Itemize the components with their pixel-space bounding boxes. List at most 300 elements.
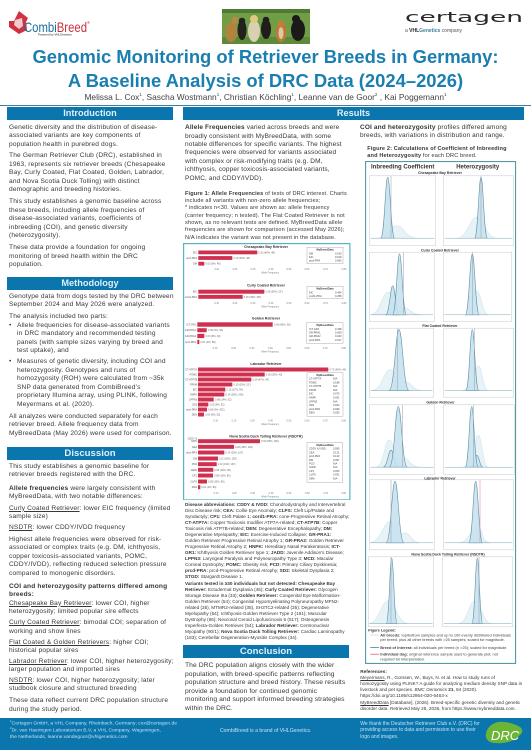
- text: highest allele frequencies: associated or complex traits (e.g. DM, ichthyosis,: [9, 544, 160, 551]
- chart: Nova Scotia Duck Tolling Retriever: 0.70: [323, 491, 329, 494]
- text: disease abbreviations: [185, 502, 349, 579]
- chart: Nova Scotia Duck Tolling Retriever: Nova Scotia Duck Tolling Retriever (NSDTR): [229, 434, 303, 438]
- text: COI and heterozygosity results: COI and heterozygosity profiles differed among: [360, 124, 507, 130]
- text: flat coated and golden COI: Flat Coated & Golden Retrievers: higher COI;: [9, 638, 149, 646]
- heading: Introduction: [7, 107, 173, 120]
- chart: Labrador Retriever: 0.035: [333, 410, 340, 414]
- chart: Nova Scotia Duck Tolling Retriever: SMA: [309, 476, 315, 480]
- text: discussion closing: during the study period.: [9, 706, 82, 712]
- footer: acknowledgement: [360, 721, 480, 740]
- chart: Labrador Retriever: 0.29 (47%; 44): [252, 378, 269, 381]
- chart: Chesapeake Bay Retriever: 0.019: [335, 254, 342, 258]
- text: introduction paragraph 2: Bay, Curly Coated, Flat Coated, Golden, Labrador,: [9, 169, 164, 176]
- chart: Curly Coated Retriever: 0.36 (50%; 22*): [266, 290, 283, 293]
- chart: Nova Scotia Duck Tolling Retriever: 0.14 (25%; 167): [225, 451, 243, 454]
- chart: Nova Scotia Duck Tolling Retriever: CDDY &: [188, 437, 197, 440]
- chart: Labrador Retriever: 0.03 (6%; 52): [205, 413, 220, 416]
- text: flat coated and golden COI: historical popular sires: [9, 647, 78, 654]
- chart: Curly Coated Retriever: 0.25 (39%; 28*): [244, 295, 261, 298]
- text: introduction paragraph 2: demographic and breeding histories.: [9, 186, 121, 193]
- chart: Labrador Retriever: 0.05 (9%; 402): [208, 408, 225, 411]
- chart: Nova Scotia Duck Tolling Retriever: N/A: [333, 461, 338, 465]
- bullet 1: [9, 322, 170, 354]
- text: introduction paragraph 3: [9, 198, 162, 239]
- logo: certagen: [405, 10, 523, 34]
- text: discussion closing: [9, 697, 168, 712]
- text: figure 1 caption: (carrier frequency; n tested). The Flat Coated Retriever is not: [185, 213, 345, 219]
- column heading: Heterozygosity: Heterozygosity: [456, 164, 500, 170]
- text: curly coated difference: Curly Coated Retriever: lower EIC frequency (limited: [9, 504, 171, 512]
- chart: Nova Scotia Duck Tolling Retriever: 0.11 (20%; 150): [219, 457, 237, 460]
- chart: Golden Retriever: 0.50: [286, 346, 292, 350]
- chart: Curly Coated Retriever: 0.70: [323, 302, 328, 304]
- text: disease abbreviations: Progressive Retinal Atrophy 2; HNPK: Hereditary Nasal Parakeratosis; ICT-: [185, 544, 340, 549]
- text: variants tested but not detected: Imperfecta-Golden Retriever (54); Labrador Retriever: Centronuclear: [185, 623, 329, 628]
- text: discussion intro: This study establishes a genomic baseline for: [9, 463, 149, 470]
- chart: Nova Scotia Duck Tolling Retriever: 0.20 (36%; 182): [235, 445, 253, 448]
- text: allele frequencies results: POMC, and CDDY/IVDD).: [185, 175, 263, 182]
- bullet 1: test uptake), and: [17, 347, 69, 354]
- chart: Labrador Retriever: SD2: [192, 403, 198, 406]
- chart: Labrador Retriever: 0.044: [333, 403, 340, 407]
- text: disease abbreviations: Golden Retriever Progressive Retinal Atrophy 1; GR-PRA2: Golden Retriever: [185, 538, 344, 543]
- text: curly coated COI: Curly Coated Retriever: bimodal COI; separation of: [9, 619, 166, 626]
- chart: Labrador Retriever: N/A: [333, 387, 338, 391]
- heading: Methodology: Methodology: [61, 278, 119, 288]
- footer: affiliations: 2 Dr. van Haeringen Laboratorium B.V, a VHL Company, Wageningen,: [10, 726, 161, 734]
- text: conclusion: [185, 662, 345, 712]
- text: allele frequencies results: notable differences for specific variants. The highest: [185, 141, 342, 148]
- chart: Curly Coated Retriever: 0.20: [233, 302, 238, 304]
- text: disease abbreviations: Disc Disease risk; CEA: Collie Eye Anomaly; CLPS: Cleft Lip/Palate and: [185, 508, 334, 513]
- text: NSDTR COI: [9, 677, 155, 692]
- text: NSDTR COI: NSDTR: lower COI, higher heterozygosity; later: [9, 677, 155, 684]
- title: [32, 46, 498, 91]
- text: allele frequencies discussion: MyBreedData, with two notable differences:: [9, 493, 143, 500]
- chart: Golden Retriever: 0.059: [335, 330, 342, 334]
- text: curly coated COI: [9, 619, 166, 634]
- bullet 2: SNP data generated from CombiBreed’s: [17, 384, 141, 391]
- text: highest allele frequencies: compared to monogenic disorders.: [9, 570, 116, 576]
- heading: Methodology: [7, 277, 173, 290]
- text: figure 1 caption: N/A indicates the variant was not present in the database.: [185, 235, 336, 241]
- text: disease abbreviations: Syndactyly; CP1: Cleft Palate 1; cord1-PRA: cone-Progressive Retinal Atrophy;: [185, 514, 349, 519]
- chart: Curly Coated Retriever: Allele Frequency: [261, 305, 280, 308]
- text: methodology closing: MyBreedData (May 2026) were used for comparison.: [9, 430, 172, 436]
- chart: Golden Retriever: 0.01 (2%; 88): [200, 340, 216, 343]
- chart: Curly Coated Retriever: 0.10: [214, 302, 220, 304]
- figure legend: Individual dog: original reference sample used to generate plot; not: [380, 651, 499, 656]
- plot group: Golden Retriever: Golden Retriever: [426, 400, 455, 404]
- column heading: Inbreeding Coefficient: Inbreeding Coefficient: [371, 164, 434, 170]
- bullet list: analysis parts: •: [9, 322, 11, 328]
- chart: Golden Retriever: 0.80: [341, 346, 347, 350]
- chart: Chesapeake Bay Retriever: 0.60: [305, 268, 310, 270]
- chart: Curly Coated Retriever: 0.30: [251, 302, 256, 304]
- text: allele frequencies results: broadly consistent with MyBreedData, with some: [185, 132, 331, 140]
- text: conclusion: The DRC population aligns closely with the wider: [185, 662, 334, 669]
- chart: Nova Scotia Duck Tolling Retriever: CEA: [309, 450, 315, 454]
- text: highest allele frequencies: [9, 536, 167, 576]
- chart: Chesapeake Bay Retriever: 0.33 (46%; 48): [258, 251, 275, 254]
- text: references: homozygosity using PLINK? A guide for analyzing medium density SNP data in: [360, 681, 522, 686]
- chart: Golden Retriever: [185, 316, 347, 353]
- text: figure 1 caption: * indicates n<30. Values are shown as: allele frequency: [185, 205, 330, 211]
- chart: Nova Scotia Duck Tolling Retriever: 0.08 (16%; 96): [214, 468, 231, 471]
- chart: Nova Scotia Duck Tolling Retriever: DM: [193, 457, 197, 460]
- figure legend: Figure Legend:: [368, 628, 396, 632]
- chart: Nova Scotia Duck Tolling Retriever: 0.60: [305, 491, 310, 494]
- chart: Nova Scotia Duck Tolling Retriever: 0.34 (56%; 180): [261, 440, 279, 443]
- chart: Golden Retriever: 0.70: [323, 346, 328, 350]
- text: figure 1 caption: shown, as no relevant tests are defined. MyBreedData allele: [185, 220, 343, 226]
- text: curly coated difference: [9, 504, 171, 520]
- plot group: Nova Scotia Duck Tolling Retriever: [368, 552, 513, 626]
- chart: Golden Retriever: 0.05 (9%; 92): [208, 329, 223, 332]
- figure 2: COI and heterozygosity density plots: [365, 161, 516, 664]
- chart: Chesapeake Bay Retriever: [186, 244, 347, 274]
- text: methodology intro: September 2024 and May 2026 were analyzed.: [9, 301, 154, 308]
- chart: Golden Retriever: Golden Retriever: [252, 316, 281, 320]
- chart: Chesapeake Bay Retriever: EIC: [193, 251, 197, 254]
- chart: Curly Coated Retriever: 0.50: [287, 302, 292, 304]
- bullet 2: [9, 358, 167, 408]
- chart: Nova Scotia Duck Tolling Retriever: 0.08 (15%; 96): [214, 474, 231, 477]
- chart: Chesapeake Bay Retriever: 0.70: [323, 268, 328, 270]
- chart: Golden Retriever: GR-PRA1: [309, 330, 321, 334]
- chart: Labrador Retriever: 0.070: [333, 391, 340, 395]
- text: variants tested but not detected: Retriever: Ectodermal Dysplasia (45); Curly Coated Retriever: Glycogen: [185, 587, 338, 592]
- chart: Labrador Retriever: DEN: [192, 413, 197, 416]
- chart: Chesapeake Bay Retriever: EIC: [309, 254, 313, 258]
- chart: Curly Coated Retriever: 0.434: [335, 290, 342, 294]
- text: references: References:: [360, 669, 387, 674]
- chart: Nova Scotia Duck Tolling Retriever: MyBreedData: [316, 443, 334, 447]
- text: disease abbreviations: STGD: Stargardt Disease 1.: [185, 574, 243, 579]
- chart: Golden Retriever: GR-PRA1: [185, 329, 197, 332]
- header rule: [0, 105, 531, 106]
- chart: Labrador Retriever: 0.80: [341, 419, 347, 422]
- chart: Labrador Retriever: N/A: [333, 384, 338, 388]
- chart: Chesapeake Bay Retriever: 0.30: [251, 268, 256, 270]
- text: curly coated COI: working and show lines: [9, 628, 81, 634]
- text: disease abbreviations: GR1: Ichthyosis Golden Retriever type 1; JADD: Juvenile Addison’s Disease;: [185, 550, 344, 555]
- chart: Labrador Retriever: CT-ATP7A: [185, 368, 197, 371]
- DRC wordmark: DRC: [491, 728, 520, 743]
- text: disease abbreviations: LPPN3: Laryngeal Paralysis and Polyneuropathy Type 3; MCD: Macular: [185, 556, 334, 561]
- chart: Chesapeake Bay Retriever: 0.40: [269, 268, 274, 270]
- chart: Nova Scotia Duck Tolling Retriever: IVDD: [191, 440, 197, 443]
- chart: Nova Scotia Duck Tolling Retriever: 0.05 (10%; 96): [208, 480, 225, 483]
- footer: affiliations: the Netherlands, leanne.vandegoor@vhlgenetics.com: [10, 735, 128, 740]
- chart: Nova Scotia Duck Tolling Retriever: prcd-PRA: [309, 454, 321, 458]
- chart: Labrador Retriever: 0.15 (27%; 54): [226, 388, 243, 391]
- text: COI and heterozygosity results: breeds, with variations in distribution and range.: [360, 132, 505, 139]
- text: labrador COI: larger population and imported sires: [9, 666, 120, 673]
- chart: Labrador Retriever: N/A: [333, 399, 338, 403]
- bullet 2: heterozygosity. Genotypes and runs of: [17, 367, 135, 374]
- chart: Golden Retriever: ICT-GR1: [186, 323, 197, 326]
- chart: Chesapeake Bay Retriever: 0.19 (33%; 48): [234, 256, 250, 259]
- chart: Golden Retriever: Allele Frequency: [261, 350, 280, 353]
- text: introduction paragraph 1: Genetic diversity and the distribution of disease-: [9, 124, 157, 131]
- text: variants tested but not detected: Myopathy (90/1); Nova Scotia Duck Tolling Retriever: Cardiac Laminopathy: [185, 629, 345, 634]
- chart: Chesapeake Bay Retriever: 0.056: [335, 258, 342, 262]
- chart: Labrador Retriever: MyBreedData: [316, 373, 334, 377]
- chart: Golden Retriever: 0.40: [268, 346, 273, 350]
- text: introduction paragraph 4: These data provide a foundation for ongoing: [9, 244, 145, 251]
- text: disease abbreviations: CT-ATP7A: Copper Toxicosis modifier ATP7A-related; CT-ATP7B: Copper: [185, 520, 337, 525]
- text: allele frequencies results: [185, 124, 342, 182]
- text: introduction paragraph 1: associated variants are key components of: [9, 132, 141, 139]
- chart: Golden Retriever: 0.60: [305, 346, 310, 350]
- text: curly coated difference: sample size): [9, 513, 48, 520]
- chart: Curly Coated Retriever: cord1-PRA: [185, 295, 197, 298]
- chart: Golden Retriever: MyBreedData: [316, 323, 334, 327]
- chart: Chesapeake Bay Retriever: prcd-PRA: [309, 258, 321, 262]
- chart: Nova Scotia Duck Tolling Retriever: JADD: [190, 468, 197, 471]
- text: conclusion: within the DRC.: [185, 705, 233, 712]
- text: introduction paragraph 2: The German Retriever Club (DRC), established in: [9, 152, 162, 159]
- chart: Nova Scotia Duck Tolling Retriever: 0.10: [214, 491, 219, 494]
- chart: Labrador Retriever: [185, 362, 347, 426]
- title: A Baseline Analysis of DRC Data (2024–2026): [68, 70, 463, 91]
- chart: Labrador Retriever: DEN: [309, 410, 315, 414]
- chart: Labrador Retriever: 0.60: [305, 419, 310, 422]
- certagen wordmark: certagen: [405, 10, 523, 26]
- chart: Labrador Retriever: 0.20: [232, 419, 237, 422]
- text: figure 1 caption: [185, 191, 347, 241]
- footer: affiliations: 1 Certagen GmbH, a VHL Company, Rheinbach, Germany; cox@certagen.de: [10, 719, 177, 727]
- chart: Chesapeake Bay Retriever: Allele Frequency: [261, 271, 280, 274]
- chart: Curly Coated Retriever: cord1-PRA: [309, 294, 322, 298]
- plot group: Flat Coated Retriever: [369, 324, 514, 397]
- chart: Nova Scotia Duck Tolling Retriever: DM: [309, 457, 313, 461]
- chart: Golden Retriever: 0.03 (6%; 92): [206, 334, 221, 338]
- chart: Labrador Retriever: LPPN3: [309, 399, 318, 403]
- heading: Discussion: Discussion: [64, 448, 116, 459]
- plot group: Golden Retriever: [369, 400, 514, 474]
- chart: Nova Scotia Duck Tolling Retriever: PCD: [309, 461, 315, 465]
- chart: Curly Coated Retriever: 0.258: [335, 294, 342, 298]
- chart: Labrador Retriever: Allele Frequency: [261, 422, 280, 426]
- chart: Labrador Retriever: 0.14 (26%; 195): [226, 393, 243, 396]
- text: COI patterns heading: [9, 582, 167, 615]
- chart: Nova Scotia Duck Tolling Retriever: 0.133: [333, 454, 340, 458]
- chart: Labrador Retriever: 0.70: [323, 419, 328, 422]
- chart: Curly Coated Retriever: 0.80: [342, 302, 347, 304]
- chart: Labrador Retriever: LPPN3: [189, 398, 198, 401]
- chart: Labrador Retriever: PFKM: [190, 383, 197, 386]
- bullet 2: homozygosity (ROH) were calculated from ~35k: [17, 375, 164, 382]
- chart: Labrador Retriever: SD2: [309, 403, 315, 407]
- icon: CombiBreed crest: [9, 11, 28, 34]
- figure legend: All breeds: top/bottom samples and up to 100 evenly distributed individuals: [380, 632, 511, 637]
- chart: Chesapeake Bay Retriever: DM: [193, 262, 197, 265]
- certagen tagline: a VHLGenetics company: [405, 28, 462, 34]
- text: figure 2 caption: [367, 146, 507, 159]
- text: methodology intro: [9, 293, 174, 308]
- chart: Labrador Retriever: 0.40: [268, 419, 274, 422]
- chart: Nova Scotia Duck Tolling Retriever: CP1: [192, 474, 198, 477]
- chart: Nova Scotia Duck Tolling Retriever: 0.80: [341, 491, 347, 494]
- text: figure 2 caption: and Heterozygosity for each DRC breed.: [367, 153, 477, 159]
- text: allele frequencies results: with complex or risk-modifying traits (e.g. DM,: [185, 158, 323, 165]
- text: flat coated and golden COI: [9, 638, 149, 654]
- plot group: Flat Coated Retriever: Flat Coated Retriever: [422, 324, 458, 328]
- bullet list: analysis parts: •: [9, 358, 11, 365]
- text: highest allele frequencies: copper toxicosis-associated variants, POMC,: [9, 552, 147, 560]
- heading: Conclusion: [183, 645, 349, 658]
- chart: Nova Scotia Duck Tolling Retriever: 0.10 (19%; 167): [218, 463, 236, 466]
- chart: Labrador Retriever: 0.08 (14%; 52): [215, 398, 232, 401]
- text: introduction paragraph 1: population health in purebred dogs.: [9, 141, 118, 148]
- chart: Chesapeake Bay Retriever: MyBreedData: [316, 247, 334, 251]
- chart: Curly Coated Retriever: EIC: [193, 290, 197, 293]
- text: methodology closing: All analyzes were conducted separately for each: [9, 412, 158, 420]
- text: allele frequencies results: ichthyosis, copper toxicosis-associated variants,: [185, 166, 330, 173]
- chart: Nova Scotia Duck Tolling Retriever: 0.031: [333, 472, 340, 476]
- footer: acknowledgement: We thank the Deutscher Retriever Club e.V. (DRC) for: [360, 721, 480, 727]
- plot group: Labrador Retriever: [369, 476, 514, 549]
- chart: Labrador Retriever: HNPK: [309, 395, 316, 399]
- chart: Labrador Retriever: 0.50: [287, 419, 292, 422]
- footer: acknowledgement: logo and images.: [360, 734, 398, 740]
- text: disease abbreviations: prcd-PRA: prcd-Progressive Retinal Atrophy; SD2: Skeletal Dysplasia 2;: [185, 568, 335, 573]
- text: figure 1 caption: include all variants with non-zero allele frequencies;: [185, 198, 320, 204]
- text: COI patterns heading: heterozygosity; limited popular sire effects: [9, 608, 139, 615]
- text: labrador COI: Labrador Retriever: lower COI, higher heterozygosity;: [9, 658, 174, 664]
- logo: CombiBreed: [9, 11, 90, 36]
- text: discussion intro: [9, 463, 149, 478]
- text: introduction paragraph 3: This study establishes a genomic baseline across: [9, 198, 161, 205]
- text: disease abbreviations: Toxicosis risk ATP7B-related; DEN: Degenerative Encephalopathy; DM:: [185, 526, 332, 531]
- text: allele frequencies results: frequencies were observed for variants associated: [185, 149, 336, 156]
- text: introduction paragraph 4: population.: [9, 261, 43, 268]
- chart: Labrador Retriever: HNPK: [190, 393, 197, 396]
- text: variants tested but not detected: Dystrophy (66); Neuronal Ceroid Lipofuscinosis 5 (517); Osteogenesis: [185, 617, 329, 622]
- heading: Introduction: Introduction: [63, 108, 117, 118]
- text: methodology intro: Genotype data from dogs tested by the DRC between: [9, 293, 174, 300]
- footer: acknowledgement: providing access to data and permission to use their: [360, 727, 476, 733]
- chart: Labrador Retriever: 0.72 (90%; 44): [330, 368, 346, 371]
- chart: Chesapeake Bay Retriever: 0.20: [233, 268, 238, 270]
- chart: Labrador Retriever: Labrador Retriever: [250, 362, 282, 366]
- chart: Labrador Retriever: POMC: [190, 373, 197, 376]
- text: introduction paragraph 3: inbreeding (COI), and genetic diversity: [9, 224, 128, 231]
- heading: Conclusion: Conclusion: [240, 646, 292, 657]
- chart: Nova Scotia Duck Tolling Retriever: 0.20: [232, 491, 237, 494]
- chart: Labrador Retriever: 0.05 (9%; 52): [210, 403, 225, 406]
- chart: Golden Retriever: 0.20: [231, 346, 237, 350]
- chart: Nova Scotia Duck Tolling Retriever: 0.595: [333, 446, 340, 450]
- chart: Nova Scotia Duck Tolling Retriever: 0.30: [250, 491, 256, 494]
- chart: Curly Coated Retriever: EIC: [309, 290, 313, 294]
- text: introduction paragraph 2: [9, 152, 165, 193]
- text: labrador COI: [9, 658, 174, 673]
- plot group: Curly Coated Retriever: [369, 248, 512, 321]
- chart: Labrador Retriever: 0.039: [333, 406, 340, 410]
- figure legend: required for interpretation.: [380, 656, 425, 661]
- text: conclusion: monitoring and support informed breeding strategies: [185, 696, 345, 703]
- text: references: Meyermans, R., Gorssen, W., Buys, N. et al. How to study runs of: [360, 675, 495, 680]
- text: introduction paragraph 2: and Nova Scotia Duck Tolling) with distinct: [9, 178, 140, 185]
- text: analysis parts lead-in: The analysis included two parts:: [9, 313, 108, 320]
- chart: Nova Scotia Duck Tolling Retriever: N/A: [333, 465, 338, 469]
- text: introduction paragraph 3: these breeds, including allele frequencies of: [9, 207, 144, 214]
- chart: Labrador Retriever: 0.188: [333, 380, 340, 384]
- chart: Nova Scotia Duck Tolling Retriever: CEA: [192, 445, 197, 448]
- text: references: https://doi.org/10.1186/s12864-020-6463-x MyBreedData [Database]. (2026). Breed-specific genetic diversity and genetic: [360, 693, 520, 705]
- text: introduction paragraph 3: disease-associated variants, coefficients of: [9, 215, 141, 222]
- text: variants tested but not detected: Myelopathy (54); Ichthyosis-Golden Retriever Type 2 (191); Muscular: [185, 611, 327, 616]
- text: variants tested but not detected: (183); Cerebellar Degeneration-Myositis Complex (34).: [185, 635, 298, 640]
- chart: Golden Retriever: 0.438: [335, 326, 342, 330]
- chart: Labrador Retriever: 0.30: [250, 419, 255, 422]
- chart: Chesapeake Bay Retriever: 0.10: [214, 268, 220, 270]
- chart: Golden Retriever: GR-PRA2: [185, 334, 197, 338]
- chart: Labrador Retriever: 0.031: [333, 395, 340, 399]
- chart: Chesapeake Bay Retriever: Chesapeake Bay Retriever: [244, 244, 289, 248]
- text: introduction paragraph 4: monitoring of breed health within the DRC: [9, 253, 138, 260]
- chart: Labrador Retriever: CT-ATP7B: [309, 384, 321, 388]
- chart: Labrador Retriever: prcd-PRA: [186, 408, 197, 411]
- chart: Nova Scotia Duck Tolling Retriever: JADD: [309, 465, 316, 469]
- figure 1: allele frequency bar charts: [183, 243, 350, 500]
- chart: Chesapeake Bay Retriever: prcd-PRA: [186, 256, 197, 259]
- footer band: [0, 718, 531, 750]
- photo: six retriever dogs on grass: [222, 9, 310, 44]
- chart: Labrador Retriever: 0.36 (55%; 40): [266, 373, 282, 376]
- text: figure 1 caption: Figure 1: Allele Frequencies of tests of DRC interest. Charts: [185, 191, 347, 197]
- chart: Nova Scotia Duck Tolling Retriever: 0.40: [269, 491, 274, 494]
- text: figure 1 caption: frequencies are shown for comparison (accessed May 2026);: [185, 227, 344, 233]
- chart: Nova Scotia Duck Tolling Retriever: PCD: [192, 463, 197, 466]
- text: COI patterns heading: Chesapeake Bay Retriever: lower COI, higher: [9, 600, 150, 606]
- text: NSDTR COI: studbook closure and structured breeding: [9, 685, 137, 692]
- chart: Chesapeake Bay Retriever: DM: [309, 251, 313, 255]
- chart: Golden Retriever: 0.043: [335, 334, 342, 338]
- figure legend: [368, 628, 511, 661]
- chart: Nova Scotia Duck Tolling Retriever: prcd-PRA: [186, 451, 197, 454]
- chart: Golden Retriever: GR-PRA2: [309, 334, 321, 338]
- text: disease abbreviations: Corneal Dystrophy; POMC: Obesity risk; PCD: Primary Ciliary Dyskinesia;: [185, 562, 337, 567]
- chart: Nova Scotia Duck Tolling Retriever: 0.097: [333, 457, 340, 461]
- bullet 2: Meyermans et al. (2020).: [17, 401, 94, 408]
- bullet 1: panels (with sample sizes varying by breed and: [17, 338, 163, 346]
- bullet 2: Measures of genetic diversity, including COI and: [17, 358, 166, 365]
- text: allele frequencies discussion: Allele frequencies were largely consistent with: [9, 484, 155, 492]
- chart: Nova Scotia Duck Tolling Retriever: 0.053: [333, 468, 340, 472]
- text: conclusion: provide a foundation for continued genomic: [185, 688, 317, 695]
- logo registered mark: ®: [87, 20, 90, 25]
- chart: Nova Scotia Duck Tolling Retriever: 0.131: [333, 450, 340, 454]
- text: introduction paragraph 2: 1963, represents six retriever breeds (Chesapeake: [9, 161, 165, 168]
- plot group: Curly Coated Retriever: Curly Coated Retriever: [421, 248, 460, 252]
- chart: Curly Coated Retriever: MyBreedData: [316, 286, 334, 290]
- footer: affiliations: [10, 719, 177, 740]
- chart: Labrador Retriever: N/A: [333, 376, 338, 380]
- text: variants tested but not detected: Storage Disease IIIa (33); Golden Retriever: Congenital Eye Malformation-: [185, 593, 341, 598]
- chart: Labrador Retriever: POMC: [309, 380, 317, 384]
- text: discussion closing: These data reflect current DRC population structure: [9, 697, 168, 704]
- chart: Nova Scotia Duck Tolling Retriever: 0.50: [287, 491, 292, 494]
- text: disease abbreviations: Degenerative Myelopathy; EIC: Exercise-Induced Collapse; GR-PRA1:: [185, 532, 331, 537]
- bullet list: analysis parts: [9, 322, 170, 408]
- text: disease abbreviations: Disease abbreviations: CDDY & IVDD: Chondrodystrophy and Intervertebral: [185, 502, 345, 507]
- text: introduction paragraph 1: [9, 124, 157, 148]
- plot group: Chesapeake Bay Retriever: [369, 170, 514, 245]
